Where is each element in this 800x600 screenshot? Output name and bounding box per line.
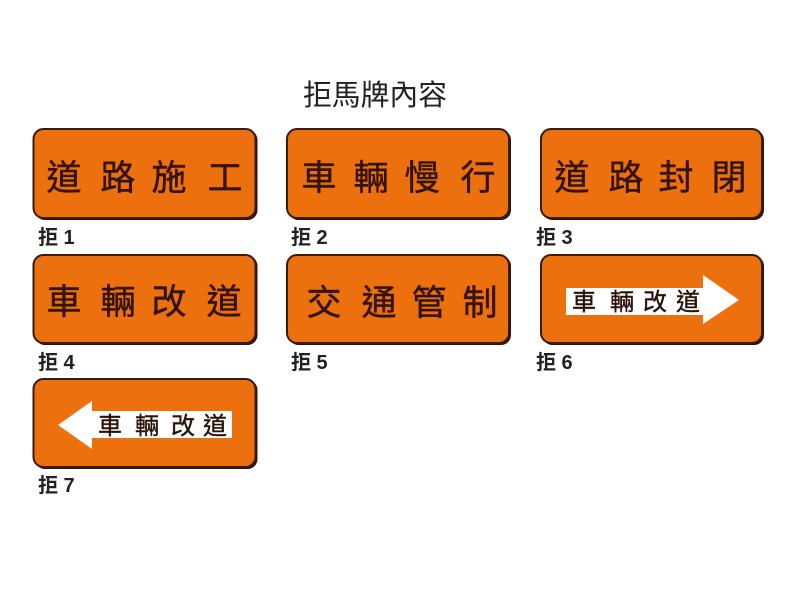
label: 拒 1: 拒 1 — [38, 226, 75, 249]
sign 4: 車輛改道: 道 — [206, 283, 242, 322]
sign 4: 車輛改道: 改 — [151, 283, 187, 322]
title: 拒馬牌內容 — [303, 80, 447, 112]
label: 拒 6: 拒 6 — [536, 351, 573, 374]
sign 7: left arrow 車輛改道: 改 — [171, 413, 195, 440]
sign 6: right arrow 車輛改道 — [541, 255, 764, 345]
sign 1: 道路施工: 道 — [46, 159, 82, 198]
sign 5: 交通管制: 管 — [411, 284, 447, 323]
sign 2: 車輛慢行: 輛 — [353, 159, 389, 198]
sign 6: right arrow 車輛改道: 輛 — [610, 289, 634, 316]
sign 3: 道路封閉: 道 — [554, 159, 590, 198]
sign 5: 交通管制: 通 — [361, 284, 397, 323]
sign 6: right arrow 車輛改道: 車 — [572, 289, 596, 316]
icon: white right arrow — [566, 275, 739, 324]
sign 1: 道路施工: 路 — [100, 159, 136, 198]
sign 2: 車輛慢行: 慢 — [404, 159, 440, 198]
sign 3: 道路封閉: 路 — [608, 159, 644, 198]
sign 7: left arrow 車輛改道: 車 — [98, 413, 122, 440]
sign 7: left arrow 車輛改道: 道 — [203, 413, 227, 440]
icon: white left arrow — [58, 401, 232, 449]
sign 5: 交通管制: 制 — [462, 284, 498, 323]
sign 7: left arrow 車輛改道: 輛 — [135, 413, 159, 440]
sign 2: 車輛慢行 — [287, 129, 511, 220]
sign 2: 車輛慢行: 車 — [301, 159, 337, 198]
sign 3: 道路封閉: 閉 — [711, 159, 747, 198]
sign 1: 道路施工: 施 — [151, 159, 187, 198]
sign 4: 車輛改道: 車 — [46, 283, 82, 322]
sign 1: 道路施工 — [34, 129, 258, 220]
label: 拒 5: 拒 5 — [291, 351, 328, 374]
sign 3: 道路封閉 — [541, 129, 764, 220]
label: 拒 4: 拒 4 — [38, 351, 76, 374]
sign 5: 交通管制: 交 — [306, 284, 342, 323]
sign 3: 道路封閉: 封 — [658, 159, 694, 198]
label: 拒 2: 拒 2 — [291, 226, 328, 249]
sign 2: 車輛慢行: 行 — [460, 159, 496, 198]
sign 4: 車輛改道 — [34, 255, 258, 345]
sign 7: left arrow 車輛改道 — [34, 379, 258, 469]
sign 5: 交通管制 — [287, 255, 511, 345]
sign 6: right arrow 車輛改道: 道 — [676, 289, 700, 316]
sign 4: 車輛改道: 輛 — [100, 283, 136, 322]
sign 1: 道路施工: 工 — [207, 159, 243, 198]
label: 拒 7: 拒 7 — [38, 474, 75, 497]
sign 6: right arrow 車輛改道: 改 — [643, 289, 667, 316]
label: 拒 3: 拒 3 — [536, 226, 573, 249]
